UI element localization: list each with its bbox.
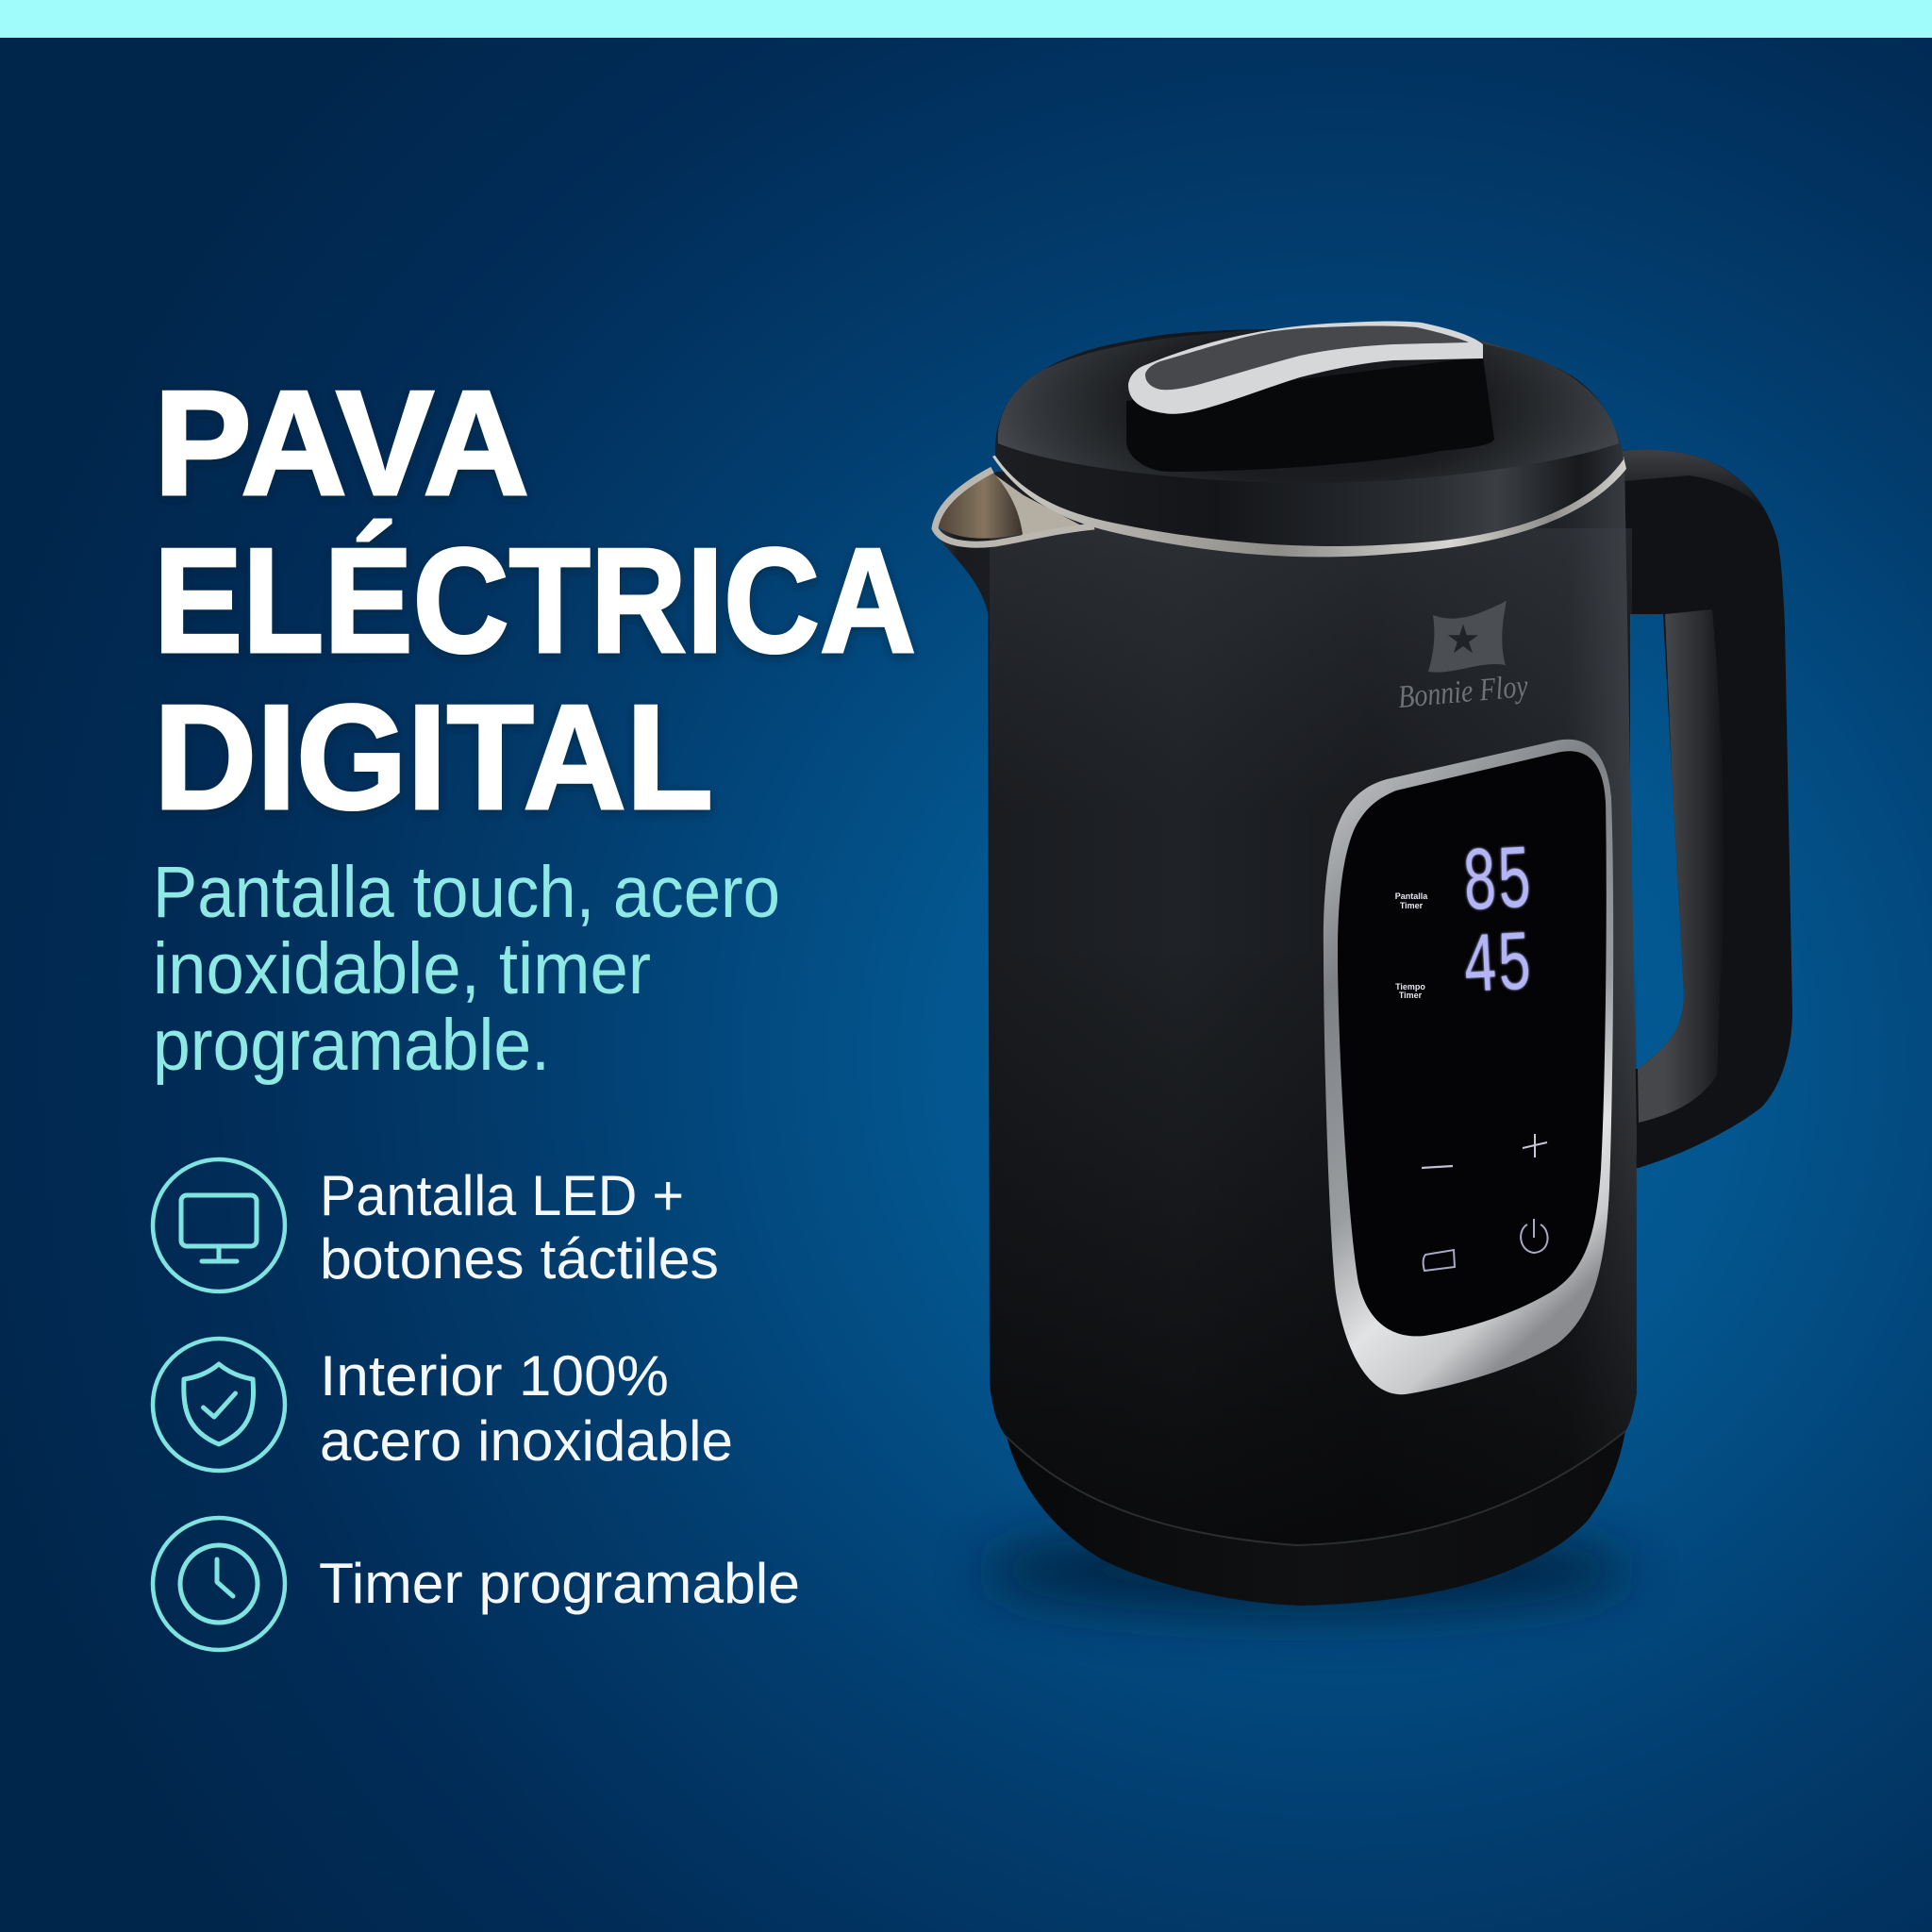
spout	[935, 470, 1094, 544]
feature text: interior	[320, 1344, 733, 1473]
top accent bar	[0, 0, 1932, 38]
screen label top: Pantalla	[1395, 891, 1428, 901]
floor shadow	[981, 1525, 1632, 1616]
feature text: pantalla	[320, 1164, 719, 1291]
subtitle: inoxidable, timer	[153, 928, 651, 1009]
body lower shading	[990, 943, 1637, 1545]
readout 45: 45	[1460, 918, 1534, 1018]
screen label top: Timer	[1400, 901, 1424, 910]
logo: flag and brand: ★	[1445, 617, 1481, 661]
feature text: interior: acero inoxidable	[320, 1409, 733, 1473]
title: ELÉCTRICA	[154, 518, 916, 684]
screen label bottom: Timer	[1399, 991, 1423, 1000]
subtitle: programable.	[153, 1005, 550, 1086]
kettle body	[937, 462, 1637, 1545]
handle	[1618, 449, 1792, 1168]
kettle product image	[935, 321, 1792, 1616]
logo: flag and brand	[1396, 601, 1530, 715]
subtitle: Pantalla touch, acero	[153, 852, 780, 933]
black screen	[1338, 751, 1607, 1336]
screen label top	[1395, 891, 1428, 910]
screen label bottom: Tiempo	[1395, 982, 1425, 991]
feature list	[153, 1159, 800, 1650]
readout 85: 85	[1460, 830, 1534, 937]
title: PAVA	[154, 360, 529, 526]
feature text: timer: Timer programable	[319, 1552, 800, 1615]
control panel	[1324, 740, 1613, 1394]
icon: mode	[1424, 1250, 1455, 1271]
feature text: pantalla: Pantalla LED +	[320, 1164, 684, 1227]
silver bezel	[1324, 740, 1613, 1394]
subtitle	[153, 852, 780, 1086]
icon: power	[1521, 1219, 1548, 1253]
icon: plus	[1523, 1134, 1547, 1158]
feature text: interior: Interior 100%	[320, 1344, 669, 1407]
title	[154, 360, 916, 841]
title: DIGITAL	[154, 675, 713, 841]
screen label bottom	[1395, 982, 1425, 1000]
icon: monitor	[153, 1159, 285, 1291]
icon: shield with check	[153, 1339, 285, 1471]
base	[1007, 1431, 1625, 1606]
icon: clock	[153, 1518, 285, 1650]
body top sheen	[990, 528, 1632, 811]
logo: flag and brand: Bonnie Floy	[1396, 669, 1530, 715]
feature text: pantalla: botones táctiles	[320, 1227, 719, 1291]
lid	[992, 321, 1626, 557]
icon: minus	[1422, 1166, 1453, 1168]
lid knob	[1126, 321, 1494, 472]
